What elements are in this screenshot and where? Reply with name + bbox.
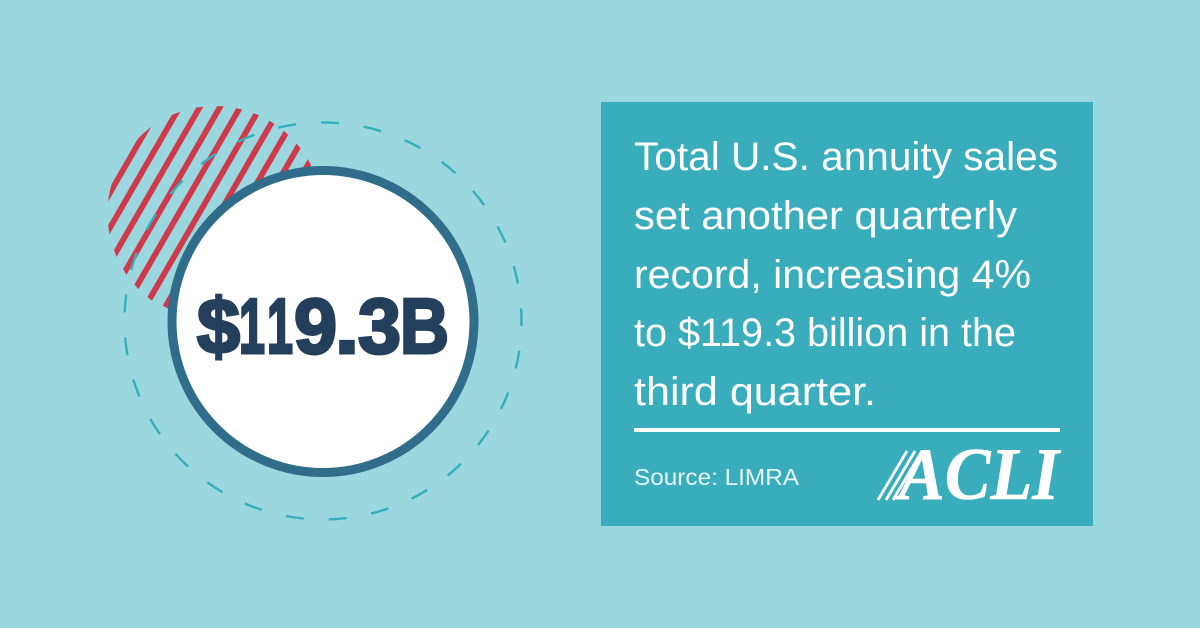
statement text: Total U.S. annuity sales bbox=[634, 135, 1058, 179]
value: 1 bbox=[267, 282, 293, 370]
dashed ring bbox=[124, 122, 522, 520]
value: 1 bbox=[239, 282, 265, 370]
statement text: record, increasing 4% bbox=[634, 253, 1031, 297]
statement text: third quarter. bbox=[634, 370, 876, 414]
value: 3 bbox=[358, 282, 401, 370]
main circle with value bbox=[172, 170, 474, 472]
striped red circle bbox=[108, 106, 311, 308]
value: 9 bbox=[294, 282, 337, 370]
statement text bbox=[634, 135, 1058, 414]
panel: callout bbox=[601, 102, 1093, 526]
logo: ACLI: ACLI bbox=[895, 434, 1061, 516]
value: B bbox=[400, 282, 449, 370]
statement text: set another quarterly bbox=[634, 194, 1017, 238]
value: . bbox=[335, 282, 359, 370]
value: $ bbox=[197, 282, 240, 370]
source: Source: LIMRA bbox=[634, 464, 800, 490]
statement text: to $119.3 billion in the bbox=[634, 311, 1016, 355]
